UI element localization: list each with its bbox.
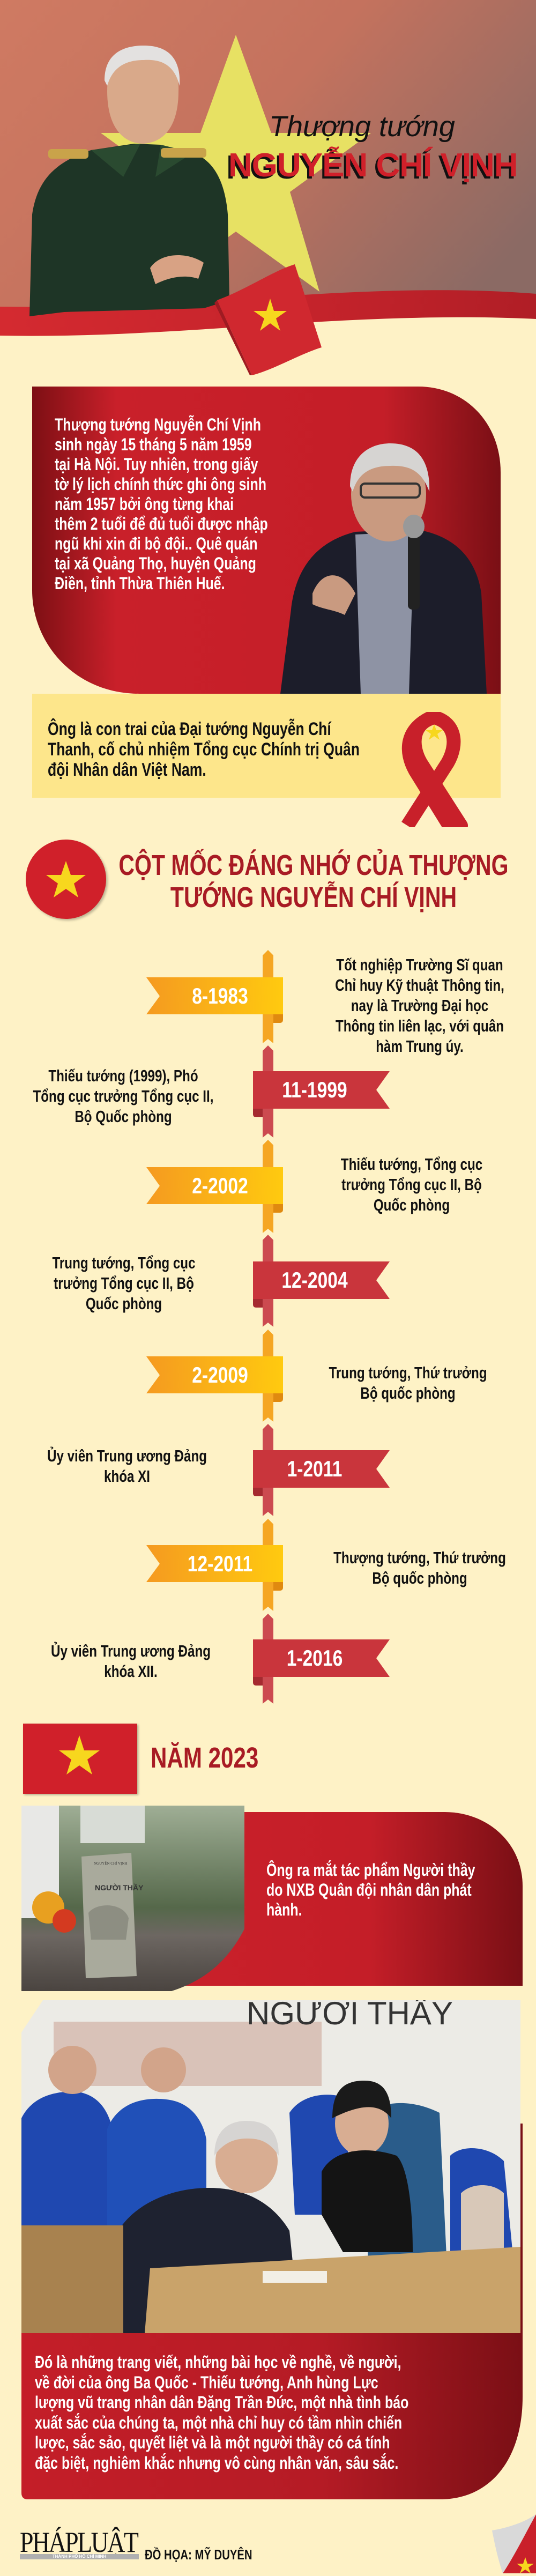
milestone: 2-2009: Trung tướng, Thứ trưởng: [329, 1363, 487, 1382]
text: biography: [55, 415, 268, 593]
name: NGUYỄN CHÍ VỊNH: [228, 147, 518, 184]
milestone: 2-2002: Thiếu tướng, Tổng cục: [341, 1155, 482, 1174]
photo: book: [21, 1806, 244, 1991]
milestone: 2-2002: 2-2002: [192, 1173, 248, 1198]
milestone: 12-2011: Bộ quốc phòng: [372, 1569, 467, 1587]
icon: big star: [101, 35, 371, 292]
milestone: 11-1999: Tổng cục trưởng Tổng cục II,: [33, 1087, 213, 1105]
milestone: 2-2002: [192, 1155, 482, 1214]
text: quote: lượng vũ trang nhân dân Đặng Trần Đức, một nhà tình báo: [35, 2393, 408, 2412]
text: biography: tại Hà Nội. Tuy nhiên, trong giấy: [55, 455, 258, 474]
milestone: 11-1999: [33, 1066, 347, 1126]
text: biography: tại xã Quảng Thọ, huyện Quảng: [55, 554, 256, 573]
panel: book launch: NGUYỄN CHÍ VỊNH: [94, 1861, 127, 1866]
text: biography: thêm 2 tuổi để đủ tuổi được nhập: [55, 514, 268, 533]
text: biography: Điền, tỉnh Thừa Thiên Huế.: [55, 574, 225, 593]
icon: flag: [23, 1724, 137, 1794]
milestone: 12-2004: trưởng Tổng cục II, Bộ: [54, 1274, 194, 1293]
milestone: 12-2004: 12-2004: [281, 1267, 348, 1293]
figure: soldier: [29, 46, 229, 316]
milestone: 8-1983: [192, 955, 504, 1056]
panel: book signing: [21, 2000, 523, 2499]
heading text: [118, 849, 509, 914]
icon: page curl flag: [492, 2514, 536, 2573]
text: biography: năm 1957 bởi ông từng khai: [55, 494, 234, 514]
milestone: 1-2011: khóa XI: [104, 1467, 150, 1486]
photo: signing: [21, 1995, 520, 2333]
milestone: 2-2009: Bộ quốc phòng: [360, 1384, 456, 1402]
text: biography: ngũ khi xin đi bộ đội.. Quê quán: [55, 534, 258, 553]
milestone: 2-2002: trưởng Tổng cục II, Bộ: [341, 1175, 482, 1194]
milestone: 12-2011: 12-2011: [188, 1551, 252, 1576]
text: book launch: Ông ra mắt tác phẩm Người thầy: [266, 1860, 475, 1880]
milestone: 11-1999: Bộ Quốc phòng: [75, 1107, 172, 1126]
text: quote: về đời của ông Ba Quốc - Thiếu tướng, Anh hùng Lực: [35, 2373, 378, 2392]
milestone: 1-2011: Ủy viên Trung ương Đảng: [47, 1446, 207, 1465]
milestone: 8-1983: Tốt nghiệp Trường Sĩ quan: [336, 955, 503, 974]
text: father: Thanh, cố chủ nhiệm Tổng cục Chính trị Quân: [48, 739, 360, 760]
heading text: CỘT MỐC ĐÁNG NHỚ CỦA THƯỢNG: [118, 849, 509, 881]
milestone: 2-2009: 2-2009: [192, 1362, 248, 1387]
text: quote: lược, sắc sảo, quyết liệt và là một người thầy có cá tính: [35, 2433, 390, 2452]
text: book launch: [266, 1860, 475, 1919]
milestone: 2-2009: [192, 1362, 487, 1402]
milestone: 1-2016: 1-2016: [287, 1645, 343, 1671]
milestone: 8-1983: Chỉ huy Kỹ thuật Thông tin,: [335, 976, 504, 994]
milestone: 8-1983: Thông tin liên lạc, với quân: [336, 1016, 504, 1035]
heading: năm 2023: [23, 1723, 258, 1796]
milestone: 8-1983: 8-1983: [192, 983, 248, 1008]
text: biography: Thượng tướng Nguyễn Chí Vịnh: [55, 415, 261, 434]
photo: portrait: [280, 443, 487, 694]
text: quote: đặc biệt, nghiêm khắc nhưng vô cùng nhân văn, sâu sắc.: [35, 2453, 398, 2473]
milestone: 8-1983: hàm Trung úy.: [376, 1037, 464, 1056]
panel: book launch: NGƯỜI THẦY: [95, 1883, 144, 1892]
heading: milestones: [26, 840, 509, 922]
milestone: 2-2002: Quốc phòng: [374, 1196, 450, 1214]
milestone: 12-2004: [52, 1253, 348, 1313]
milestone: 12-2011: Thượng tướng, Thứ trưởng: [333, 1548, 506, 1567]
text: father: [48, 718, 360, 780]
text: quote: xuất sắc của chúng ta, một nhà chỉ huy có tầm nhìn chiến: [35, 2412, 402, 2432]
panel: biography: [32, 387, 501, 798]
text: biography: tờ lý lịch chính thức ghi ông sinh: [55, 474, 266, 494]
heading text: NĂM 2023: [151, 1742, 258, 1774]
milestone: 12-2011: [188, 1548, 506, 1587]
panel: book launch: [21, 1806, 523, 1991]
milestone: 11-1999: 11-1999: [282, 1077, 347, 1102]
milestone: 1-2016: Ủy viên Trung ương Đảng: [51, 1642, 211, 1660]
text: quote: [35, 2352, 408, 2473]
footer: logo: PHÁPLUẬT: [20, 2526, 137, 2558]
milestone: 12-2004: Trung tướng, Tổng cục: [52, 1253, 196, 1272]
text: quote: Đó là những trang viết, những bài học về nghề, về người,: [35, 2352, 401, 2372]
ribbon wave: [0, 290, 536, 336]
icon: small flag: [214, 264, 322, 380]
icon: red ribbon: [401, 712, 468, 827]
heading text: TƯỚNG NGUYỄN CHÍ VỊNH: [170, 881, 457, 914]
timeline: [146, 950, 390, 1704]
milestone: 8-1983: nay là Trường Đại học: [351, 996, 488, 1015]
milestone: 12-2004: Quốc phòng: [86, 1294, 162, 1313]
hero banner: [0, 0, 536, 375]
footer: credit: ĐỒ HỌA: MỸ DUYÊN: [145, 2547, 252, 2563]
subtitle: Thượng tướng: Thượng tướng: [269, 110, 455, 143]
text: biography: sinh ngày 15 tháng 5 năm 1959: [55, 435, 252, 454]
text: father: đội Nhân dân Việt Nam.: [48, 760, 206, 780]
milestone: 1-2011: 1-2011: [287, 1456, 342, 1481]
text: book launch: hành.: [266, 1900, 302, 1919]
milestone: 11-1999: Thiếu tướng (1999), Phó: [48, 1066, 198, 1085]
milestone: 1-2016: khóa XII.: [104, 1662, 158, 1681]
title: [228, 110, 518, 184]
milestone: 1-2016: [51, 1642, 343, 1681]
icon: flag circle: [26, 840, 106, 919]
text: book launch: do NXB Quân đội nhân dân phát: [266, 1880, 472, 1899]
footer: logo: THÀNH PHỐ HỒ CHÍ MINH: [53, 2554, 106, 2559]
milestone: 1-2011: [47, 1446, 342, 1486]
text: father: Ông là con trai của Đại tướng Nguyễn Chí: [48, 719, 331, 739]
